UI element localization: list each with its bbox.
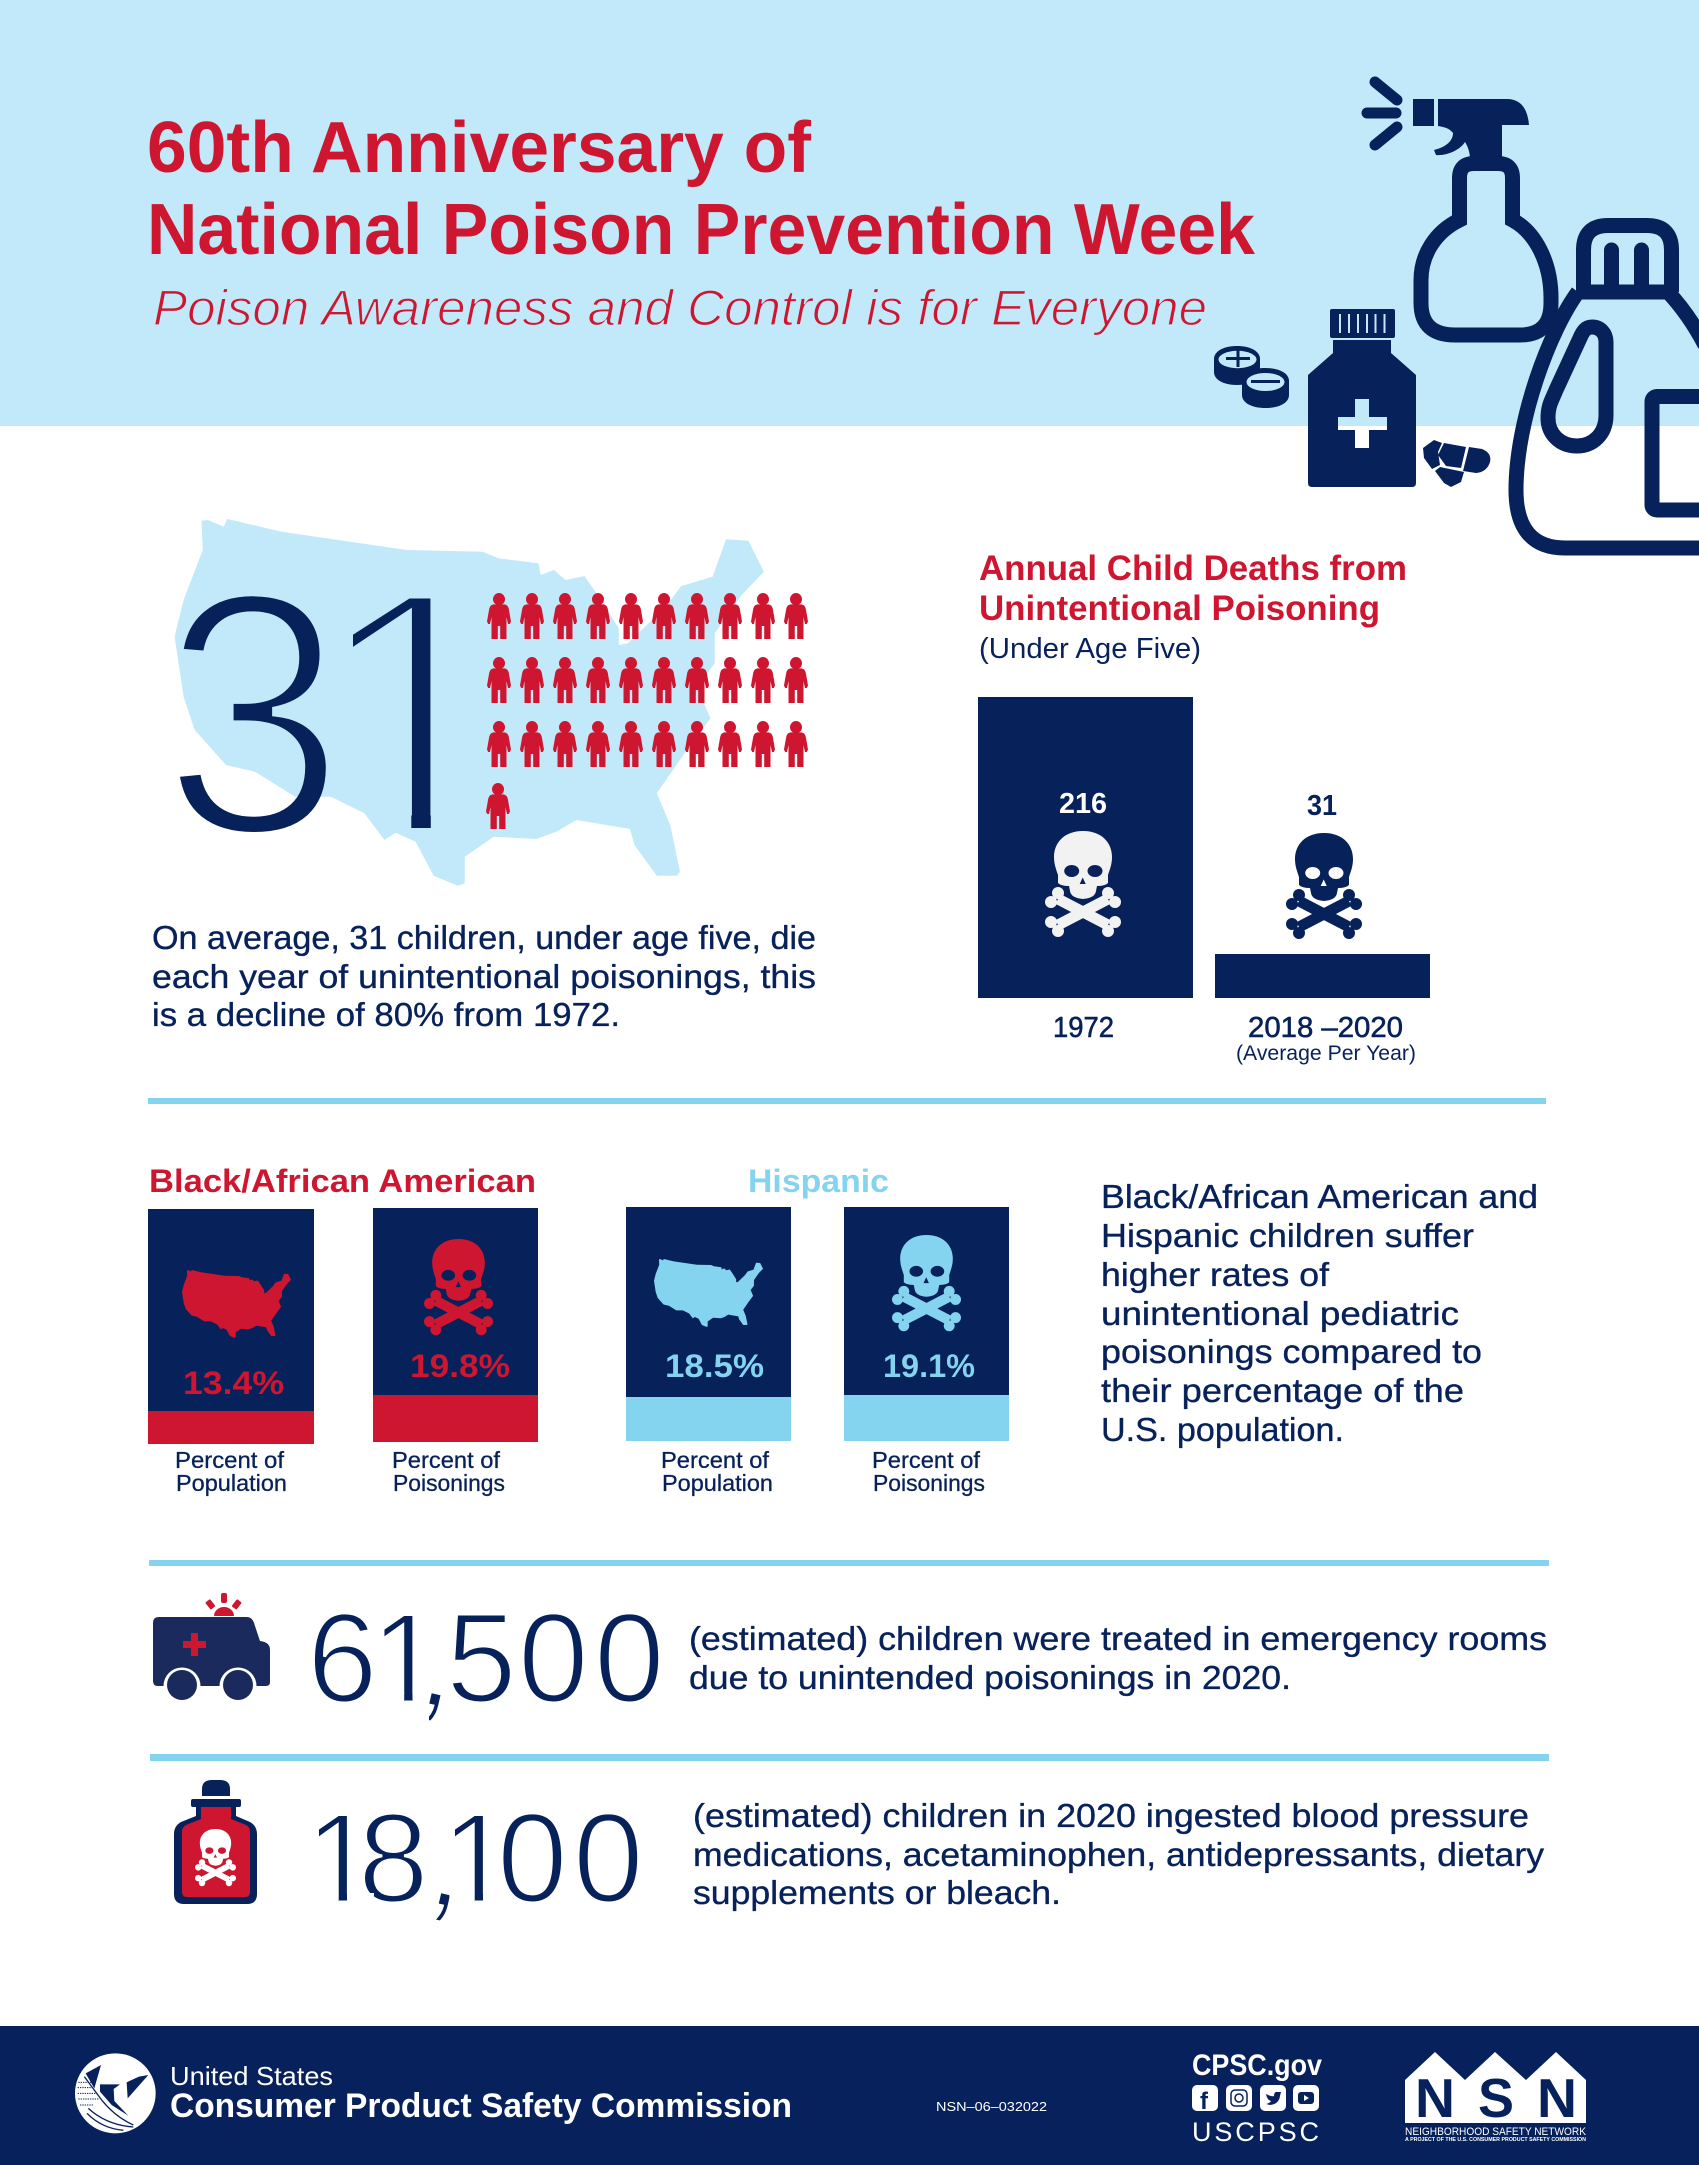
chart heading: Unintentional Poisoning xyxy=(979,589,1380,628)
card: percent of poisonings: Poisonings xyxy=(393,1470,505,1496)
panel: 31 children map xyxy=(152,516,816,1033)
text block: disparities xyxy=(1101,1178,1538,1448)
icon: pills xyxy=(1423,440,1490,487)
logo: neighborhood safety network: N xyxy=(1537,2067,1577,2129)
title: 60th Anniversary of xyxy=(147,108,812,188)
website and social xyxy=(1192,2049,1322,2147)
bar: 1972: 216 xyxy=(1059,788,1107,820)
card: percent of poisonings: Percent of xyxy=(392,1447,501,1473)
panel: hispanic xyxy=(626,1163,1009,1496)
text block: disparities: unintentional pediatric xyxy=(1101,1295,1459,1332)
text block: disparities: poisonings compared to xyxy=(1101,1333,1482,1370)
text block: disparities: Black/African American and xyxy=(1101,1178,1538,1215)
subtitle: Poison Awareness and Control is for Everyone xyxy=(153,280,1207,336)
bar: 2018-2020: 31 xyxy=(1307,790,1337,822)
logo: neighborhood safety network xyxy=(1405,2052,1587,2143)
icon: tablets xyxy=(1214,346,1289,408)
logo: neighborhood safety network: A PROJECT OF THE U.S. CONSUMER PRODUCT SAFETY COMMISSION xyxy=(1405,2137,1586,2143)
group heading: Black/African American xyxy=(149,1163,536,1199)
card: percent of population: Percent of xyxy=(661,1447,770,1473)
card: percent of population: Percent of xyxy=(175,1447,285,1473)
card: percent of poisonings: Percent of xyxy=(872,1447,981,1473)
bar: 2018-2020: 2018 –2020 xyxy=(1248,1012,1403,1044)
header band xyxy=(0,0,1699,426)
agency name xyxy=(170,2061,792,2125)
text: emergency rooms: due to unintended poisonings in 2020. xyxy=(689,1659,1291,1696)
icon: detergent jug xyxy=(1516,226,1699,548)
website and social: CPSC.gov xyxy=(1192,2049,1322,2082)
logo: neighborhood safety network: NEIGHBORHOOD SAFETY NETWORK xyxy=(1405,2126,1587,2138)
logo: CPSC seal xyxy=(75,2053,156,2133)
icon: spray bottle xyxy=(1367,82,1551,335)
card: percent of poisonings xyxy=(844,1207,1009,1496)
panel: emergency room stat xyxy=(153,1593,1546,1720)
card: percent of population: 13.4% xyxy=(183,1365,284,1401)
chart heading: Annual Child Deaths from xyxy=(979,549,1407,588)
text: emergency rooms xyxy=(689,1620,1547,1696)
pictogram: 31 children xyxy=(486,593,808,829)
big number 31: 3 xyxy=(162,520,345,908)
card: percent of population xyxy=(626,1207,791,1496)
chart heading xyxy=(979,549,1407,665)
panel: ingestion stat xyxy=(174,1780,1544,1920)
website and social: USCPSC xyxy=(1192,2117,1319,2147)
text: ingested substances: supplements or bleach. xyxy=(693,1874,1061,1911)
bar: 1972 xyxy=(978,697,1193,1044)
bar: 1972: 1972 xyxy=(1053,1012,1114,1044)
logo: neighborhood safety network: N xyxy=(1415,2067,1455,2129)
text block: disparities: higher rates of xyxy=(1101,1256,1330,1293)
group heading: Hispanic xyxy=(748,1163,889,1199)
icon: facebook: f xyxy=(1200,2088,1209,2115)
icon: twitter xyxy=(1260,2085,1286,2111)
card: percent of poisonings: 19.8% xyxy=(410,1348,510,1384)
text block: disparities: their percentage of the xyxy=(1101,1372,1464,1409)
footer xyxy=(0,2026,1699,2165)
big number 31: 1 xyxy=(309,516,520,911)
icon: medicine bottle xyxy=(1308,309,1416,487)
icon: instagram xyxy=(1226,2085,1252,2111)
icon: youtube xyxy=(1293,2085,1319,2111)
text block: disparities: Hispanic children suffer xyxy=(1101,1217,1474,1254)
card: percent of population xyxy=(148,1209,314,1496)
big number 18,100: 18,100 xyxy=(305,1787,644,1936)
text: emergency rooms: (estimated) children were treated in emergency rooms xyxy=(689,1620,1547,1657)
title xyxy=(147,108,1256,270)
panel: annual child deaths chart xyxy=(978,549,1430,1065)
card: percent of population: Population xyxy=(176,1470,287,1496)
card: percent of population: Population xyxy=(662,1470,773,1496)
text: ingested substances: (estimated) children in 2020 ingested blood pressure xyxy=(693,1797,1529,1834)
big number 61,500: 61,500 xyxy=(307,1587,665,1736)
paragraph: 31 children xyxy=(152,919,816,1033)
icon: ambulance xyxy=(150,1593,275,1704)
text: ingested substances xyxy=(693,1797,1545,1911)
agency name: Consumer Product Safety Commission xyxy=(170,2087,792,2125)
logo: neighborhood safety network: S xyxy=(1478,2067,1514,2129)
big number 31 xyxy=(179,596,431,832)
panel: black/african american xyxy=(148,1163,538,1496)
bar: 2018-2020: (Average Per Year) xyxy=(1236,1042,1416,1065)
agency name: United States xyxy=(170,2061,333,2091)
card: percent of poisonings: 19.1% xyxy=(883,1348,975,1384)
paragraph: 31 children: is a decline of 80% from 1972. xyxy=(152,996,620,1033)
card: percent of population: 18.5% xyxy=(665,1348,764,1384)
title: National Poison Prevention Week xyxy=(147,190,1256,270)
paragraph: 31 children: each year of unintentional poisonings, this xyxy=(152,958,816,995)
text: ingested substances: medications, acetaminophen, antidepressants, dietary xyxy=(693,1836,1545,1873)
text block: disparities: U.S. population. xyxy=(1101,1411,1344,1448)
card: percent of poisonings xyxy=(373,1208,538,1496)
map of the United States xyxy=(175,519,764,886)
bar: 2018-2020 xyxy=(1215,790,1430,1065)
paragraph: 31 children: On average, 31 children, under age five, die xyxy=(152,919,816,956)
icon: poison bottle xyxy=(174,1780,257,1904)
card: percent of poisonings: Poisonings xyxy=(873,1470,985,1496)
publication number: NSN–06–032022 xyxy=(936,2099,1047,2114)
chart heading: (Under Age Five) xyxy=(979,633,1201,665)
